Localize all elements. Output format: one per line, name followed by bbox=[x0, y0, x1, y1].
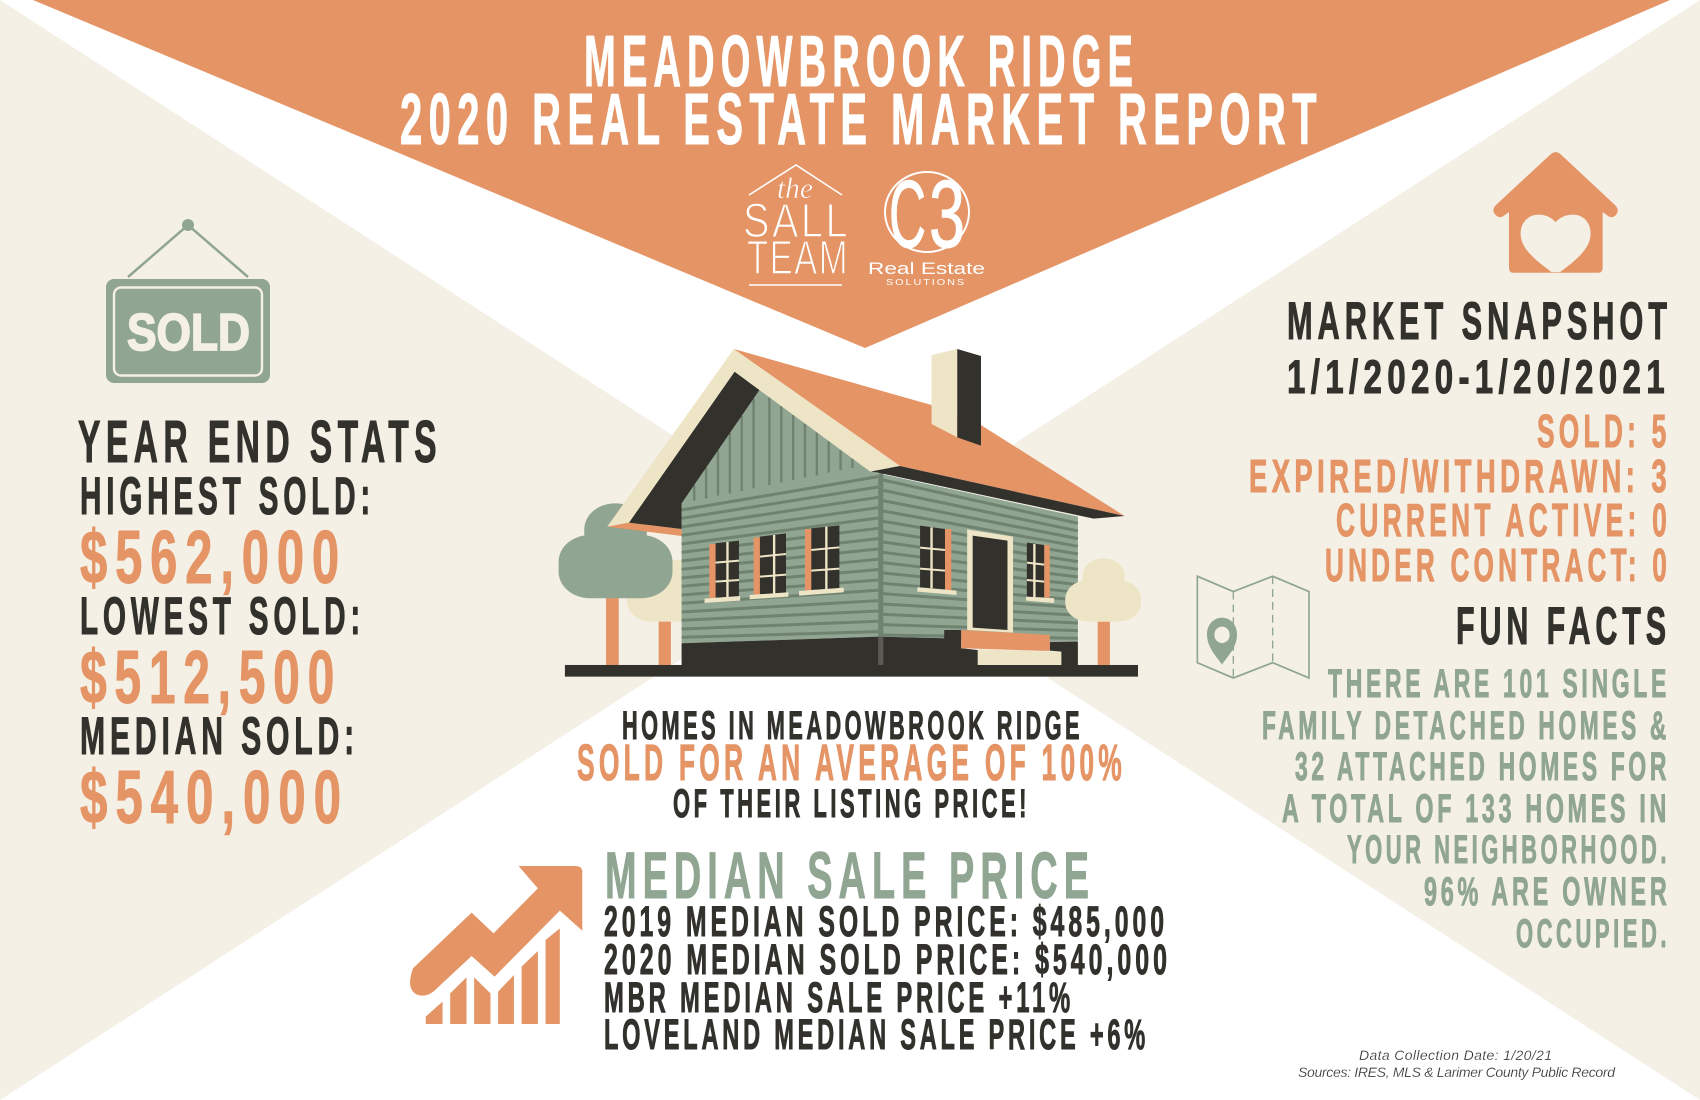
icon: map with pin bbox=[1197, 576, 1309, 678]
fun facts paragraph bbox=[1262, 662, 1670, 956]
title bbox=[400, 22, 1323, 160]
logo: the Sall Team bbox=[743, 165, 850, 285]
callout: average sale vs listing price: OF THEIR LISTING PRICE! bbox=[673, 782, 1030, 826]
value: highest sold: $562,000 bbox=[80, 515, 347, 599]
green tree bbox=[559, 503, 672, 665]
top orange banner bbox=[33, 0, 1670, 348]
ground bbox=[565, 665, 1138, 677]
logo: C3 Real Estate Solutions: SOLUTIONS bbox=[886, 277, 966, 287]
heading: median sale price: MEDIAN SALE PRICE bbox=[605, 838, 1095, 912]
median sale price bbox=[604, 838, 1171, 1059]
callout: average sale vs listing price bbox=[577, 704, 1126, 826]
footnote: data sources: Sources: IRES, MLS & Larimer County Public Record bbox=[1298, 1064, 1616, 1080]
icon: rising arrow and bars bbox=[410, 866, 582, 1024]
icon: sold sign: SOLD bbox=[127, 304, 250, 362]
market snapshot bbox=[1249, 292, 1672, 591]
fun facts bbox=[1262, 597, 1671, 956]
logo: the Sall Team: the bbox=[777, 172, 813, 205]
logo: C3 Real Estate Solutions bbox=[868, 161, 985, 287]
heading: year end stats: YEAR END STATS bbox=[78, 409, 442, 475]
label: median sold: MEDIAN SOLD: bbox=[80, 707, 359, 766]
stat: 2020 median: 2020 MEDIAN SOLD PRICE: $540,000 bbox=[604, 936, 1171, 984]
walls bbox=[682, 390, 1078, 643]
logo: C3 Real Estate Solutions: Real Estate bbox=[868, 259, 985, 278]
illustration: house with trees bbox=[559, 349, 1141, 677]
icon: sold sign bbox=[106, 219, 270, 383]
right tree bbox=[1065, 558, 1141, 665]
icon: house with heart bbox=[1493, 152, 1618, 273]
value: median sold: $540,000 bbox=[80, 755, 349, 839]
logo: C3 Real Estate Solutions: 3 bbox=[929, 161, 965, 268]
callout: average sale vs listing price: HOMES IN MEADOWBROOK RIDGE bbox=[622, 704, 1083, 748]
stat: 2019 median: 2019 MEDIAN SOLD PRICE: $485,000 bbox=[604, 898, 1168, 946]
callout: average sale vs listing price: SOLD FOR AN AVERAGE OF 100% bbox=[577, 734, 1126, 791]
logo: the Sall Team: TEAM bbox=[747, 232, 849, 285]
foundation bbox=[682, 630, 1078, 665]
value: lowest sold: $512,500 bbox=[80, 635, 342, 719]
stat: Loveland change: LOVELAND MEDIAN SALE PRICE +6% bbox=[604, 1011, 1149, 1059]
back tree left bbox=[627, 560, 706, 665]
footnote: data sources: Data Collection Date: 1/20/21 bbox=[1359, 1047, 1552, 1063]
stat: MBR change: MBR MEDIAN SALE PRICE +11% bbox=[604, 974, 1074, 1022]
label: highest sold: HIGHEST SOLD: bbox=[80, 467, 375, 526]
footnote: data sources bbox=[1298, 1047, 1616, 1080]
logo: the Sall Team: SALL bbox=[743, 195, 850, 248]
title: MEADOWBROOK RIDGE bbox=[584, 22, 1139, 102]
year end stats bbox=[78, 409, 442, 839]
roof bbox=[607, 349, 1125, 536]
door bbox=[967, 529, 1013, 633]
windows bbox=[705, 525, 1054, 603]
label: lowest sold: LOWEST SOLD: bbox=[80, 587, 365, 646]
logo: C3 Real Estate Solutions: C bbox=[889, 161, 926, 268]
chimney bbox=[932, 349, 981, 446]
